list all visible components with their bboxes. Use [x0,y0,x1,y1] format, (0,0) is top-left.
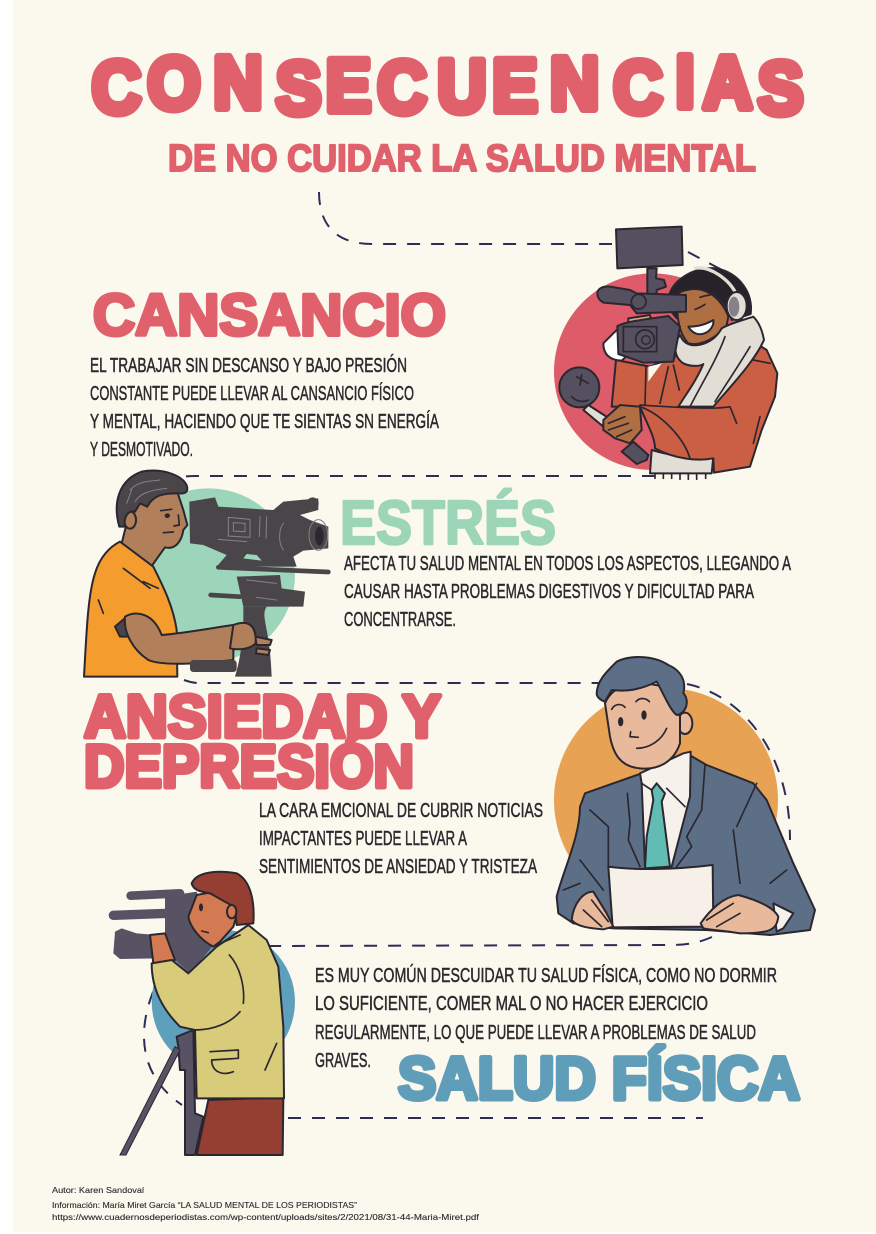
text block: ansiedad y depresión [259,800,543,878]
tripod and video camera [189,497,328,677]
footer credits: Autor: Karen Sandoval [52,1185,144,1195]
text block: cansancio: CONSTANTE PUEDE LLEVAR AL CANSANCIO FÍSICO [90,382,414,405]
footer credits: https://www.cuadernosdeperiodistas.com/wp-content/uploads/sites/2/2021/08/31-44-Maria-Miret.pdf [52,1212,480,1222]
text block: estrés [344,553,791,631]
text block: salud física: GRAVES. [315,1050,371,1072]
subtitle: DE NO CUIDAR LA SALUD MENTAL [168,138,756,180]
heading: estrés: ESTRÉS [340,489,556,558]
heading: ansiedad y depresión [84,683,441,800]
heading: ansiedad y depresión: DEPRESIÓN [84,733,414,800]
heading: ansiedad y depresión: ANSIEDAD Y [84,683,441,750]
dashed connector path [144,192,790,1118]
text block: ansiedad y depresión: IMPACTANTES PUEDE LLEVAR A [259,828,467,850]
text block: cansancio: Y MENTAL, HACIENDO QUE TE SIENTAS SN ENERGÍA [90,410,439,433]
illustration: news anchor [554,657,815,935]
illustration: cameraman with yellow jacket [113,872,295,1155]
text block: cansancio [90,354,439,461]
text block: estrés: CONCENTRARSE. [344,609,456,631]
text block: ansiedad y depresión: SENTIMIENTOS DE ANSIEDAD Y TRISTEZA [259,856,537,878]
heading: salud física: SALUD FÍSICA [398,1045,800,1112]
footer credits [52,1185,480,1222]
video camera silhouette [113,892,215,973]
text block: cansancio: EL TRABAJAR SIN DESCANSO Y BAJO PRESIÓN [90,354,407,377]
illustration: cameraman with orange shirt [84,471,328,677]
title: CONSECUENCIAS [92,41,803,131]
text block: salud física [315,964,777,1072]
text block: cansancio: Y DESMOTIVADO. [90,439,193,461]
text block: ansiedad y depresión: LA CARA EMCIONAL DE CUBRIR NOTICIAS [259,800,543,822]
footer credits: Información: María Miret García “LA SALUD MENTAL DE LOS PERIODISTAS” [52,1200,357,1210]
text block: salud física: LO SUFICIENTE, COMER MAL O NO HACER EJERCICIO [315,993,708,1015]
heading: cansancio: CANSANCIO [93,283,446,348]
illustration: reporter with camera and microphone [554,227,777,479]
